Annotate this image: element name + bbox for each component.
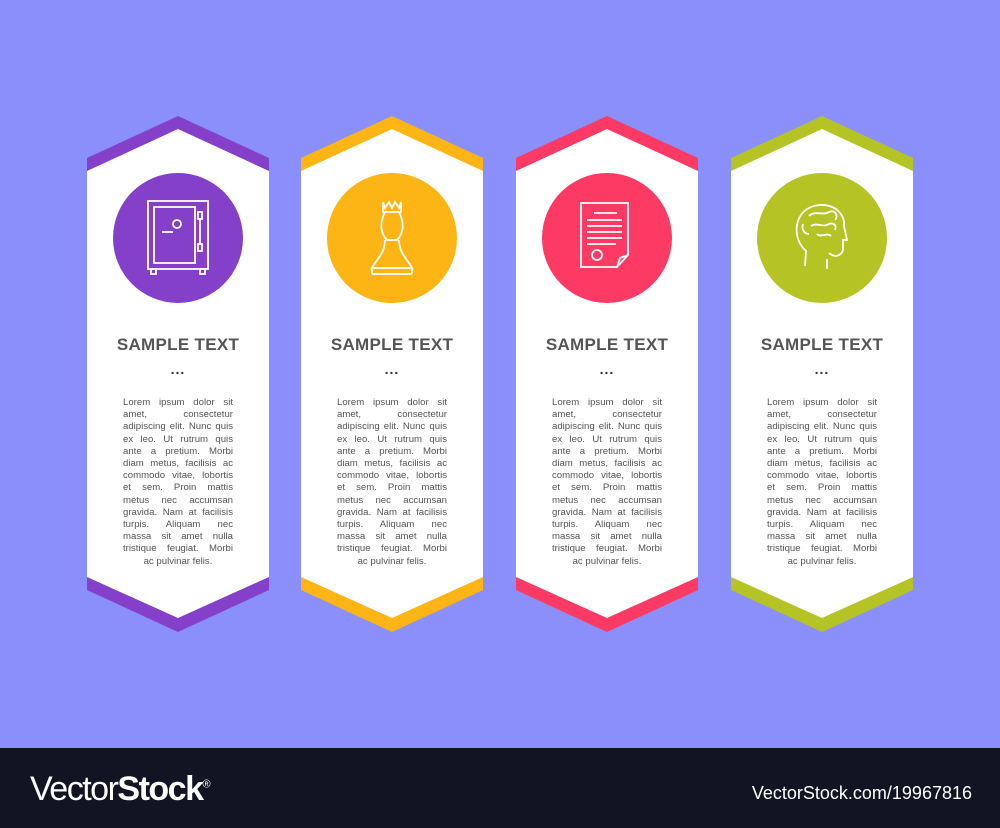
body text 1: metus nec accumsan [123, 495, 233, 506]
dots 3: ... [600, 361, 614, 377]
body text 2: tristique feugiat. Morbi [337, 543, 447, 554]
body text 1: ex leo. Ut rutrum quis [123, 434, 233, 445]
card 2: chess queen [301, 116, 483, 632]
body text 1 [123, 397, 233, 567]
body text 4: metus nec accumsan [767, 495, 877, 506]
card 3: document [516, 116, 698, 632]
body text 1: commodo vitae, lobortis [123, 470, 233, 481]
body text 4: adipiscing elit. Nunc quis [767, 421, 877, 432]
body text 3 [552, 397, 662, 567]
body text 4: Lorem ipsum dolor sit [767, 397, 877, 408]
body text 3: amet, consectetur [552, 409, 662, 420]
body text 1: amet, consectetur [123, 409, 233, 420]
body text 1: et sem. Proin mattis [123, 482, 233, 493]
dots 2: ... [385, 361, 399, 377]
footer bar [0, 748, 1000, 828]
body text 2: amet, consectetur [337, 409, 447, 420]
body text 3: adipiscing elit. Nunc quis [552, 421, 662, 432]
body text 4: et sem. Proin mattis [767, 482, 877, 493]
body text 3: Lorem ipsum dolor sit [552, 397, 662, 408]
title 4: SAMPLE TEXT [761, 335, 883, 354]
body text 1: diam metus, facilisis ac [123, 458, 233, 469]
body text 2: diam metus, facilisis ac [337, 458, 447, 469]
body text 2: adipiscing elit. Nunc quis [337, 421, 447, 432]
footer url: VectorStock.com/19967816 [752, 783, 972, 803]
body text 4: ac pulvinar felis. [788, 556, 856, 567]
body text 3: tristique feugiat. Morbi [552, 543, 662, 554]
body text 1: ac pulvinar felis. [144, 556, 212, 567]
body text 1: massa sit amet nulla [123, 531, 233, 542]
body text 4: massa sit amet nulla [767, 531, 877, 542]
body text 4: turpis. Aliquam nec [767, 519, 877, 530]
body text 3: gravida. Nam at facilisis [552, 507, 662, 518]
body text 3: ante a pretium. Morbi [552, 446, 662, 457]
body text 2: ante a pretium. Morbi [337, 446, 447, 457]
body text 1: ante a pretium. Morbi [123, 446, 233, 457]
body text 1: adipiscing elit. Nunc quis [123, 421, 233, 432]
body text 4 [767, 397, 877, 567]
body text 2: ex leo. Ut rutrum quis [337, 434, 447, 445]
body text 4: gravida. Nam at facilisis [767, 507, 877, 518]
body text 3: ex leo. Ut rutrum quis [552, 434, 662, 445]
body text 3: diam metus, facilisis ac [552, 458, 662, 469]
body text 1: turpis. Aliquam nec [123, 519, 233, 530]
title 1: SAMPLE TEXT [117, 335, 239, 354]
body text 4: diam metus, facilisis ac [767, 458, 877, 469]
body text 3: massa sit amet nulla [552, 531, 662, 542]
body text 2: ac pulvinar felis. [358, 556, 426, 567]
body text 3: metus nec accumsan [552, 495, 662, 506]
body text 1: gravida. Nam at facilisis [123, 507, 233, 518]
card 1: safe [87, 116, 269, 632]
footer logo: VectorStock® [30, 770, 209, 808]
body text 3: turpis. Aliquam nec [552, 519, 662, 530]
body text 3: et sem. Proin mattis [552, 482, 662, 493]
body text 2: commodo vitae, lobortis [337, 470, 447, 481]
body text 1: Lorem ipsum dolor sit [123, 397, 233, 408]
body text 4: ante a pretium. Morbi [767, 446, 877, 457]
body text 4: ex leo. Ut rutrum quis [767, 434, 877, 445]
body text 4: amet, consectetur [767, 409, 877, 420]
body text 3: commodo vitae, lobortis [552, 470, 662, 481]
body text 2: et sem. Proin mattis [337, 482, 447, 493]
title 2: SAMPLE TEXT [331, 335, 453, 354]
body text 2: turpis. Aliquam nec [337, 519, 447, 530]
body text 3: ac pulvinar felis. [573, 556, 641, 567]
body text 2: gravida. Nam at facilisis [337, 507, 447, 518]
card 4: head with brain [731, 116, 913, 632]
body text 1: tristique feugiat. Morbi [123, 543, 233, 554]
title 3: SAMPLE TEXT [546, 335, 668, 354]
dots 4: ... [815, 361, 829, 377]
dots 1: ... [171, 361, 185, 377]
body text 4: commodo vitae, lobortis [767, 470, 877, 481]
body text 2 [337, 397, 447, 567]
body text 2: Lorem ipsum dolor sit [337, 397, 447, 408]
body text 4: tristique feugiat. Morbi [767, 543, 877, 554]
body text 2: metus nec accumsan [337, 495, 447, 506]
body text 2: massa sit amet nulla [337, 531, 447, 542]
